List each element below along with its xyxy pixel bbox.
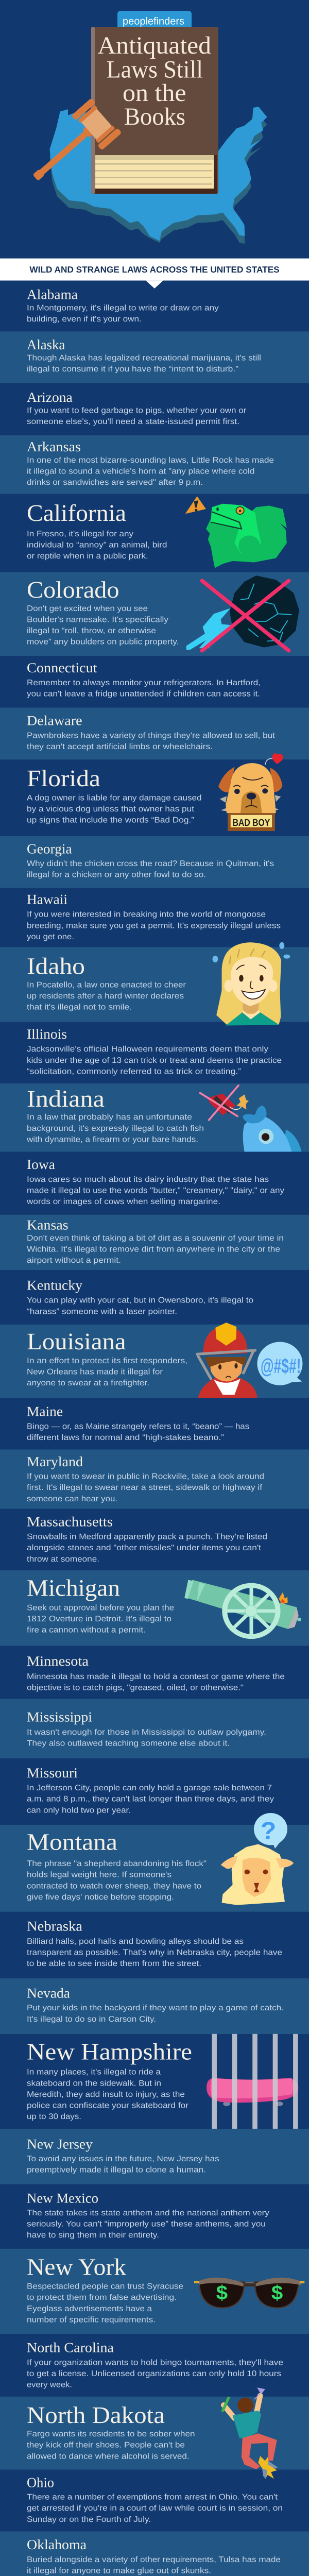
text block	[26, 1175, 284, 1206]
text block: Billiard halls, pool halls and bowling alleys should be as	[27, 1937, 244, 1946]
text block: Buried alongside a variety of other requirements, Tulsa has made	[27, 2555, 281, 2564]
heading: Michigan	[27, 1574, 120, 1601]
text block: get arrested if you're in a court of law while court is in session, on	[27, 2504, 283, 2513]
heading: Florida	[27, 765, 100, 791]
panel: Montana	[0, 1825, 309, 1912]
icon: smiling blond girl with sweat drops	[213, 942, 290, 1026]
panel: Louisiana	[0, 1325, 309, 1398]
text block: A dog owner is liable for any damage caused	[27, 793, 202, 802]
panel: Florida	[0, 759, 309, 836]
text block: In Jefferson City, people can only hold a garage sale between 7	[27, 1784, 272, 1792]
logo tab: peoplefinders	[123, 15, 184, 27]
text block: Snowballs in Medford apparently pack a punch. They're listed	[27, 1532, 267, 1541]
text block	[27, 1728, 266, 1748]
title: Laws Still	[107, 56, 203, 83]
panel: Maryland	[0, 1450, 309, 1509]
panel: Nebraska	[0, 1912, 309, 1978]
panel: Colorado	[0, 572, 309, 656]
text block: they kick off their shoes. People can't be	[27, 2441, 185, 2450]
text block: up to 30 days.	[27, 2112, 81, 2121]
text block: It wasn't enough for those in Mississippi to outlaw polygamy.	[27, 1728, 266, 1737]
panel: North Carolina	[0, 2334, 309, 2397]
text block: In a law that probably has an unfortunate	[27, 1113, 192, 1122]
panel: Michigan	[0, 1570, 309, 1646]
text block: If your organization wants to hold bingo tournaments, they'll have	[27, 2358, 283, 2367]
text block	[27, 406, 246, 426]
heading: New Jersey	[27, 2136, 93, 2151]
logo tab	[117, 11, 192, 27]
heading: Alaska	[27, 337, 65, 352]
text block: seriously. You can't “improperly use” these anthems, and you	[27, 2219, 266, 2229]
heading: Minnesota	[27, 1653, 89, 1669]
icon: firefighter and swearing speech bubble	[197, 1323, 302, 1398]
title: Antiquated	[97, 32, 211, 59]
panel: Oklahoma	[0, 2532, 309, 2576]
heading: Colorado	[27, 577, 119, 603]
text block	[27, 530, 167, 561]
text block: skateboard on the sidewalk. But in	[27, 2079, 161, 2088]
text block: Don't even think of taking a bit of dirt as a souvenir of your time in	[27, 1234, 284, 1243]
heading: New York	[27, 2253, 126, 2280]
heading: New Mexico	[27, 2190, 98, 2206]
text block: 1812 Overture in Detroit. It's illegal to	[27, 1615, 171, 1623]
text block	[27, 679, 261, 699]
heading: Kansas	[27, 1217, 68, 1232]
panel: California	[0, 494, 309, 572]
text block: drinks or sandwiches are served" after 9 p.m.	[27, 478, 203, 487]
text block: a.m. and 8 p.m., they can't last longer than three days, and they	[27, 1795, 274, 1804]
heading: Georgia	[27, 841, 72, 856]
text block: up residents after a hard winter declares	[27, 992, 184, 1001]
text block: throw at someone.	[27, 1555, 99, 1564]
text block: or reptile when in a public park.	[27, 552, 148, 561]
text block: Fargo wants its residents to be sober when	[27, 2430, 195, 2438]
book	[91, 27, 218, 194]
text block: can only hold two per year.	[27, 1806, 131, 1815]
heading: Indiana	[27, 1086, 105, 1112]
text block: it illegal to sound a vehicle's horn at "any place where cold	[27, 467, 254, 476]
text block	[27, 910, 281, 941]
panel: New Mexico	[0, 2184, 309, 2249]
text block: someone can hear you.	[27, 1495, 117, 1503]
text block: Sunday or on the Fourth of July.	[27, 2515, 151, 2524]
text block: up signs that include the words “Bad Dog.”	[27, 816, 194, 824]
text block: first. It's illegal to swear near a street, sidewalk or highway if	[27, 1483, 263, 1492]
text block: preemptively made it illegal to clone a human.	[27, 2166, 206, 2175]
text block	[27, 1296, 253, 1316]
text block: building, even if it's your own.	[27, 315, 142, 324]
panel: Idaho	[0, 947, 309, 1022]
panel: Missouri	[0, 1758, 309, 1825]
icon: skateboard behind bars	[207, 2034, 298, 2129]
text block: words or images of cows when selling margarine.	[26, 1197, 220, 1206]
text block: made it illegal to use the words "butter," "creamery," "dairy," or any	[27, 1187, 284, 1195]
text block: give five days' notice before stopping.	[27, 1893, 174, 1902]
text block: move” any boulders on public property.	[27, 638, 179, 647]
text block	[27, 2358, 283, 2389]
text block	[27, 2209, 269, 2240]
heading: New Hampshire	[27, 2038, 192, 2065]
text block: anyone to swear at a firefighter.	[27, 1379, 149, 1387]
text block: it illegal for anyone to make glue out of skunks.	[27, 2567, 211, 2575]
text block: number of specific requirements.	[27, 2315, 156, 2324]
heading: Nebraska	[27, 1919, 82, 1934]
heading: Alabama	[27, 286, 78, 302]
heading: Mississippi	[27, 1709, 92, 1724]
text block: someone else's, you'll need a state-issued permit first.	[27, 417, 239, 426]
map of the United States	[49, 107, 267, 244]
panel: New Jersey	[0, 2129, 309, 2184]
heading: Massachusetts	[27, 1514, 113, 1530]
text block: “harass” someone with a laser pointer.	[27, 1307, 177, 1316]
panel: Kentucky	[0, 1270, 309, 1325]
panel: North Dakota	[0, 2397, 309, 2470]
text block: Bespectacled people can trust Syracuse	[27, 2282, 183, 2291]
text block: It's illegal to do so in Carson City.	[27, 2015, 156, 2024]
text block: To avoid any issues in the future, New Jersey has	[27, 2155, 219, 2163]
text block: you can't leave a fridge unattended if children can access it.	[27, 690, 260, 699]
icon: cannon	[184, 1580, 301, 1636]
icon: gavel	[20, 98, 122, 195]
text block	[27, 2282, 183, 2324]
text block: There are a number of exemptions from arrest in Ohio. You can't	[27, 2493, 278, 2502]
text block: If you want to swear in public in Rockville, take a look around	[27, 1472, 264, 1481]
panel: Iowa	[0, 1152, 309, 1215]
text block: In one of the most bizarre-sounding laws, Little Rock has made	[27, 456, 274, 465]
heading: California	[27, 500, 126, 526]
subtitle banner: WILD AND STRANGE LAWS ACROSS THE UNITED STATES	[29, 265, 280, 275]
icon: bad dog with sign: BAD BOY	[233, 817, 270, 828]
heading: North Dakota	[27, 2402, 165, 2428]
heading: Idaho	[27, 953, 85, 979]
text block: If you want to feed garbage to pigs, whether your own or	[27, 406, 246, 415]
text block	[27, 456, 274, 487]
text block: every week.	[27, 2381, 72, 2389]
text block: kids under the age of 13 can trick or treat and deems the practice	[27, 1056, 282, 1065]
text block: In an effort to protect its first responders,	[27, 1357, 187, 1365]
text block: they can't accept artificial limbs or wheelchairs.	[27, 742, 213, 751]
text block: In Pocatello, a law once enacted to cheer	[27, 981, 186, 989]
panel: Kansas	[0, 1215, 309, 1270]
icon: sunglasses with dollar signs: $	[271, 2282, 283, 2303]
text block: airport without a permit.	[27, 1256, 121, 1265]
text block	[27, 731, 276, 751]
text block	[27, 981, 186, 1012]
text block: illegal to “roll, throw, or otherwise	[27, 626, 156, 635]
text block: that it's illegal not to smile.	[27, 1003, 132, 1012]
heading: Montana	[27, 1829, 117, 1855]
header panel	[0, 0, 309, 259]
text block: allowed to dance where alcohol is served.	[27, 2452, 190, 2461]
text block: If you were interested in breaking into the world of mongoose	[27, 910, 266, 919]
text block: Minnesota has made it illegal to hold a contest or game where the	[27, 1672, 285, 1681]
text block: New Orleans has made it illegal for	[27, 1368, 163, 1377]
text block: The phrase "a shepherd abandoning his flock"	[27, 1859, 207, 1868]
heading: Oklahoma	[27, 2537, 87, 2552]
text block	[27, 2493, 283, 2524]
text block: Iowa cares so much about its dairy industry that the state has	[27, 1175, 269, 1184]
title: Books	[124, 103, 185, 130]
icon: warning sign and iguana	[185, 496, 287, 568]
panel: Massachusetts	[0, 1509, 309, 1570]
panel: Mississippi	[0, 1699, 309, 1758]
heading: Ohio	[27, 2475, 54, 2490]
heading: Maine	[27, 1404, 63, 1419]
text block: You can play with your cat, but in Owensboro, it's illegal to	[27, 1296, 253, 1305]
text block: Bingo — or, as Maine strangely refers to it, “beano” — has	[27, 1422, 249, 1431]
text block: objective is to catch pigs, "greased, oiled, or otherwise."	[27, 1684, 244, 1692]
text block: Eyeglass advertisements have a	[27, 2304, 152, 2313]
text block: background, it's expressly illegal to catch fish	[27, 1124, 204, 1133]
text block: The state takes its state anthem and the national anthem very	[27, 2209, 269, 2217]
text block	[27, 1357, 187, 1387]
panel: Alabama	[0, 281, 309, 331]
heading: Louisiana	[27, 1328, 126, 1354]
text block: Don't get excited when you see	[27, 604, 148, 613]
text block: illegal for a chicken or any other fowl to do so.	[27, 871, 206, 879]
heading: North Carolina	[27, 2340, 114, 2355]
panel: Illinois	[0, 1022, 309, 1083]
text block: Put your kids in the backyard if they want to play a game of catch.	[27, 2004, 284, 2012]
text block: with dynamite, a firearm or your bare hands.	[26, 1135, 198, 1144]
heading: Kentucky	[27, 1278, 83, 1293]
panel: Georgia	[0, 836, 309, 888]
text block: Jacksonville's official Halloween requirements deem that only	[27, 1045, 268, 1054]
icon: sunglasses with dollar signs: $	[216, 2282, 228, 2303]
text block: holds legal weight here. If someone's	[27, 1871, 171, 1879]
text block: illegal to consume it if you have the “intent to disturb.”	[27, 365, 238, 374]
panel: Arizona	[0, 383, 309, 435]
text block	[27, 1784, 274, 1815]
heading: Maryland	[27, 1454, 83, 1469]
text block	[27, 2430, 195, 2461]
heading: Hawaii	[27, 892, 67, 907]
text block	[26, 1113, 204, 1144]
text block: by a vicious dog unless that owner has put	[27, 805, 195, 814]
panel: Indiana	[0, 1083, 309, 1152]
text block: They also outlawed teaching someone else about it.	[27, 1739, 230, 1748]
text block: you get one.	[27, 933, 74, 941]
panel: Ohio	[0, 2470, 309, 2532]
text block	[27, 1859, 207, 1902]
panel: Nevada	[0, 1978, 309, 2034]
title	[97, 32, 211, 130]
panel: Hawaii	[0, 888, 309, 947]
panel: Minnesota	[0, 1646, 309, 1699]
text block	[27, 1234, 284, 1265]
text block: police can confiscate your skateboard for	[27, 2102, 188, 2110]
text block	[27, 1672, 285, 1692]
text block: Though Alaska has legalized recreational marijuana, it's still	[27, 353, 261, 362]
text block	[27, 2004, 284, 2024]
panel: Maine	[0, 1398, 309, 1450]
icon: fish and crossed out dynamite	[200, 1086, 302, 1151]
text block: Seek out approval before you plan the	[27, 1603, 174, 1612]
text block: In Montgomery, it's illegal to write or draw on any	[27, 303, 219, 312]
heading: Arizona	[27, 389, 73, 405]
text block	[27, 303, 219, 324]
text block: contracted to watch over sheep, they have to	[27, 1882, 201, 1890]
text block	[27, 1603, 174, 1635]
subtitle banner	[0, 259, 309, 289]
text block: different laws for normal and “high-stakes beano.”	[27, 1433, 224, 1442]
text block: transparent as possible. That's why in Nebraska city, people have	[27, 1948, 282, 1957]
text block: In Fresno, it's illegal for any	[27, 530, 133, 538]
text block: “solicitation, commonly referred to as trick or treating.”	[27, 1067, 241, 1076]
panel: Alaska	[0, 331, 309, 383]
panel: New York	[0, 2249, 309, 2334]
text block: Remember to always monitor your refrigerators. In Hartford,	[27, 679, 261, 687]
title: on the	[123, 79, 186, 107]
text block: to be able to see inside them from the street.	[27, 1959, 201, 1968]
heading: Arkansas	[27, 439, 81, 454]
text block	[27, 1532, 267, 1564]
text block: alongside stones and "other missiles" under items you can't	[27, 1544, 262, 1552]
text block: Why didn't the chicken cross the road? Because in Quitman, it's	[27, 859, 274, 868]
text block: Pawnbrokers have a variety of things they're allowed to sell, but	[27, 731, 276, 740]
text block	[27, 1472, 264, 1503]
icon: confused sheep with speech bubble	[221, 1813, 294, 1905]
heading: Missouri	[27, 1765, 78, 1781]
text block: to protect them from false advertising.	[27, 2293, 177, 2302]
panel: Arkansas	[0, 435, 309, 494]
text block	[27, 604, 179, 647]
text block	[27, 793, 202, 824]
text block	[27, 353, 261, 374]
text block	[27, 1045, 282, 1076]
panel: Delaware	[0, 708, 309, 759]
text block: Meredith, they add insult to injury, as the	[27, 2090, 185, 2099]
text block: to get a license. Unlicensed organizations can only hold 10 hours	[27, 2369, 281, 2378]
heading: Delaware	[27, 713, 82, 728]
text block: fire a cannon without a permit.	[27, 1626, 146, 1635]
text block	[27, 2068, 188, 2121]
heading: Nevada	[27, 1986, 70, 2001]
heading: Iowa	[27, 1157, 55, 1172]
text block: have to sing them in their entirety.	[27, 2231, 159, 2240]
icon: confused sheep with speech bubble: ?	[261, 1817, 276, 1844]
panel: New Hampshire	[0, 2034, 309, 2129]
panel: Connecticut	[0, 656, 309, 708]
heading: Illinois	[27, 1026, 67, 1042]
text block	[27, 2155, 219, 2175]
text block: Boulder's namesake. It's specifically	[27, 615, 168, 624]
icon: crossed out boulder and man	[186, 575, 299, 651]
icon: bad dog with sign	[218, 753, 283, 831]
icon: dancing man with drinks	[222, 2388, 278, 2479]
text block	[27, 859, 274, 879]
text block: In many places, it's illegal to ride a	[27, 2068, 161, 2077]
text block: Wichita. It's illegal to remove dirt from anywhere in the city or the	[27, 1245, 280, 1254]
text block	[27, 1422, 249, 1442]
text block: individual to “annoy” an animal, bird	[27, 541, 167, 549]
icon: sunglasses with dollar signs	[194, 2278, 304, 2308]
text block: breeding, make sure you get a permit. It's expressly illegal unless	[27, 921, 281, 930]
text block	[27, 2555, 281, 2575]
heading: Connecticut	[27, 660, 97, 675]
text block	[27, 1937, 282, 1968]
